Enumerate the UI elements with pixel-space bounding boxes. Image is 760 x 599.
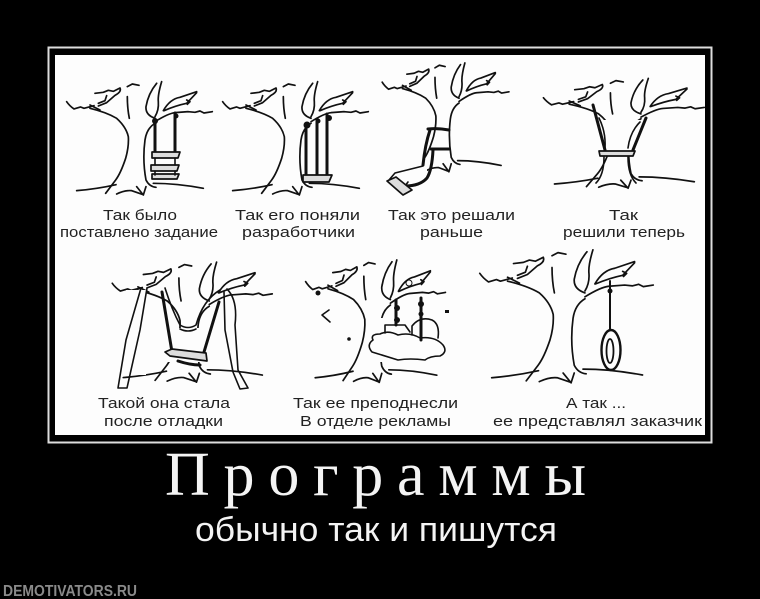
title: Программы: [165, 441, 586, 509]
caption: Так ее преподнесли: [293, 395, 458, 412]
caption: [235, 207, 360, 241]
panel: as it is solved now: [543, 78, 704, 241]
subtitle: обычно так и пишутся: [195, 511, 557, 549]
caption: Такой она стала: [98, 395, 231, 412]
panel: as it became after debugging: [98, 262, 272, 430]
icon: tree with swing around the trunk: [543, 78, 704, 188]
caption: [493, 395, 703, 430]
picture frame: [48, 48, 712, 442]
caption: Так его поняли: [235, 207, 360, 224]
panel: as developers understood it: [223, 82, 368, 241]
caption: [563, 207, 685, 241]
caption: Так было: [103, 207, 177, 224]
icon: tree with fallen swing: [382, 63, 509, 195]
icon: tree with tyre swing: [480, 250, 653, 383]
caption: [388, 207, 515, 241]
panel: as the customer imagined it: [480, 250, 703, 430]
caption: ее представлял заказчик: [493, 413, 703, 430]
caption: разработчики: [242, 224, 355, 241]
icon: tree with three rope swing: [223, 82, 368, 195]
panel: as the marketing department presented it: [293, 260, 458, 430]
caption: раньше: [420, 224, 483, 241]
caption: А так ...: [566, 395, 626, 412]
caption: В отделе рекламы: [300, 413, 451, 430]
icon: tree propped with posts and swing: [112, 262, 272, 389]
caption: поставлено задание: [60, 224, 218, 241]
icon: tree with stacked swing: [67, 82, 212, 195]
caption: [98, 395, 231, 430]
caption: [60, 207, 218, 241]
panel: as it was solved before: [382, 63, 515, 241]
caption: Так это решали: [388, 207, 515, 224]
caption: Так: [609, 207, 639, 224]
icon: tree with cloud sofa: [306, 260, 449, 382]
panel: as the task was set: [60, 82, 218, 241]
caption: решили теперь: [563, 224, 685, 241]
caption: после отладки: [104, 413, 223, 430]
caption: [293, 395, 458, 430]
